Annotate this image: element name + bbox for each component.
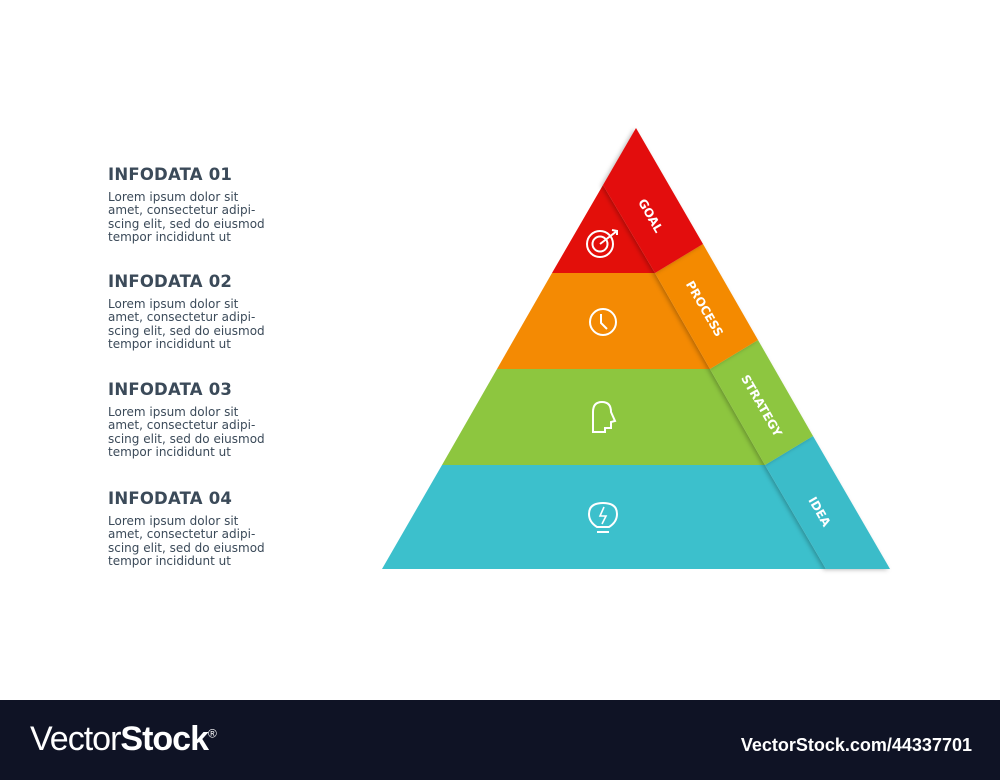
strip: strategy <box>710 340 813 465</box>
layer: red <box>552 185 655 273</box>
icon: head <box>593 402 615 432</box>
icon: clock <box>590 309 616 335</box>
text block: infodata 02: amet, consectetur adipi- <box>108 310 255 324</box>
layer: blue <box>382 465 826 569</box>
text block: infodata 02: INFODATA 02 <box>108 272 232 291</box>
label: idea: IDEA <box>805 494 834 530</box>
layer: orange <box>497 273 710 369</box>
text block: infodata 04: Lorem ipsum dolor sit <box>108 514 238 528</box>
text block: infodata 04: scing elit, sed do eiusmod <box>108 541 265 555</box>
layer: green <box>442 369 765 465</box>
text block: infodata 03: Lorem ipsum dolor sit <box>108 405 238 419</box>
text block: infodata 03: scing elit, sed do eiusmod <box>108 432 265 446</box>
text block: infodata 02 <box>108 272 265 351</box>
text block: infodata 04: amet, consectetur adipi- <box>108 527 255 541</box>
text block: infodata 02: tempor incididunt ut <box>108 337 231 351</box>
text block: infodata 01: tempor incididunt ut <box>108 230 231 244</box>
label: process: PROCESS <box>683 278 726 339</box>
label: strategy: STRATEGY <box>738 372 785 439</box>
text block: infodata 01: scing elit, sed do eiusmod <box>108 217 265 231</box>
footer bar <box>0 700 1000 780</box>
label: goal: GOAL <box>635 196 666 235</box>
text block: infodata 03: amet, consectetur adipi- <box>108 418 255 432</box>
text block: infodata 04: INFODATA 04 <box>108 489 232 508</box>
text block: infodata 03: INFODATA 03 <box>108 380 232 399</box>
footer logo: VectorStock® <box>30 720 216 758</box>
text block: infodata 01: amet, consectetur adipi- <box>108 203 255 217</box>
text block: infodata 01: Lorem ipsum dolor sit <box>108 190 238 204</box>
strip: idea <box>765 436 890 569</box>
text block: infodata 03: tempor incididunt ut <box>108 445 231 459</box>
text block: infodata 01 <box>108 165 265 244</box>
icon: target <box>587 230 617 257</box>
text block: infodata 02: scing elit, sed do eiusmod <box>108 324 265 338</box>
strip: process <box>655 244 758 369</box>
strip: goal <box>603 128 703 273</box>
footer id: VectorStock.com/44337701 <box>741 735 972 755</box>
text block: infodata 01: INFODATA 01 <box>108 165 232 184</box>
text block: infodata 04: tempor incididunt ut <box>108 554 231 568</box>
icon: bulb <box>589 503 617 532</box>
text block: infodata 02: Lorem ipsum dolor sit <box>108 297 238 311</box>
text block: infodata 03 <box>108 380 265 459</box>
text block: infodata 04 <box>108 489 265 568</box>
